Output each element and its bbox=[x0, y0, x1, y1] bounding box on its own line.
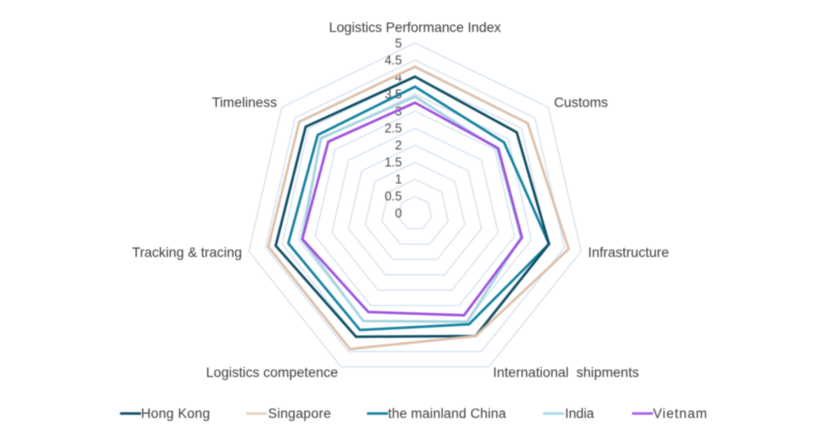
axis label: Logistics Performance Index: Logistics Performance Index bbox=[329, 20, 501, 35]
legend item: India bbox=[543, 406, 594, 421]
series: Hong Kong bbox=[276, 77, 549, 337]
scale tick labels: 1.5 bbox=[385, 156, 402, 170]
axis label: International shipments: International shipments bbox=[493, 365, 639, 380]
scale tick labels: 2.5 bbox=[385, 122, 402, 136]
scale tick labels: 1 bbox=[395, 172, 402, 186]
axis label: Logistics competence: Logistics competence bbox=[206, 365, 338, 380]
scale tick labels bbox=[385, 36, 402, 220]
scale tick labels: 0 bbox=[395, 206, 402, 220]
series: India bbox=[302, 97, 521, 322]
series: Singapore bbox=[268, 67, 569, 349]
scale tick labels: 2 bbox=[395, 138, 402, 152]
legend item: India: India bbox=[565, 406, 594, 421]
scale tick labels: 3 bbox=[395, 104, 402, 118]
scale tick labels: 4 bbox=[395, 70, 402, 84]
scale tick labels: 5 bbox=[395, 36, 402, 50]
scale tick labels: 3.5 bbox=[385, 88, 402, 102]
series: the mainland China bbox=[288, 87, 549, 330]
legend item: the mainland China: the mainland China bbox=[388, 406, 506, 421]
series: Vietnam bbox=[302, 103, 522, 315]
scale tick labels: 4.5 bbox=[385, 54, 402, 68]
legend bbox=[120, 406, 707, 421]
legend item: Hong Kong: Hong Kong bbox=[141, 406, 210, 421]
scale tick labels: 0.5 bbox=[385, 190, 402, 204]
legend item: Vietnam: Vietnam bbox=[653, 406, 707, 421]
legend item: Singapore: Singapore bbox=[268, 406, 331, 421]
axis label: Tracking & tracing: Tracking & tracing bbox=[132, 245, 242, 260]
axis label: Infrastructure: Infrastructure bbox=[588, 245, 669, 260]
axis label: Customs: Customs bbox=[554, 95, 608, 110]
axis label: Timeliness: Timeliness bbox=[212, 95, 277, 110]
radar grid bbox=[249, 43, 581, 367]
